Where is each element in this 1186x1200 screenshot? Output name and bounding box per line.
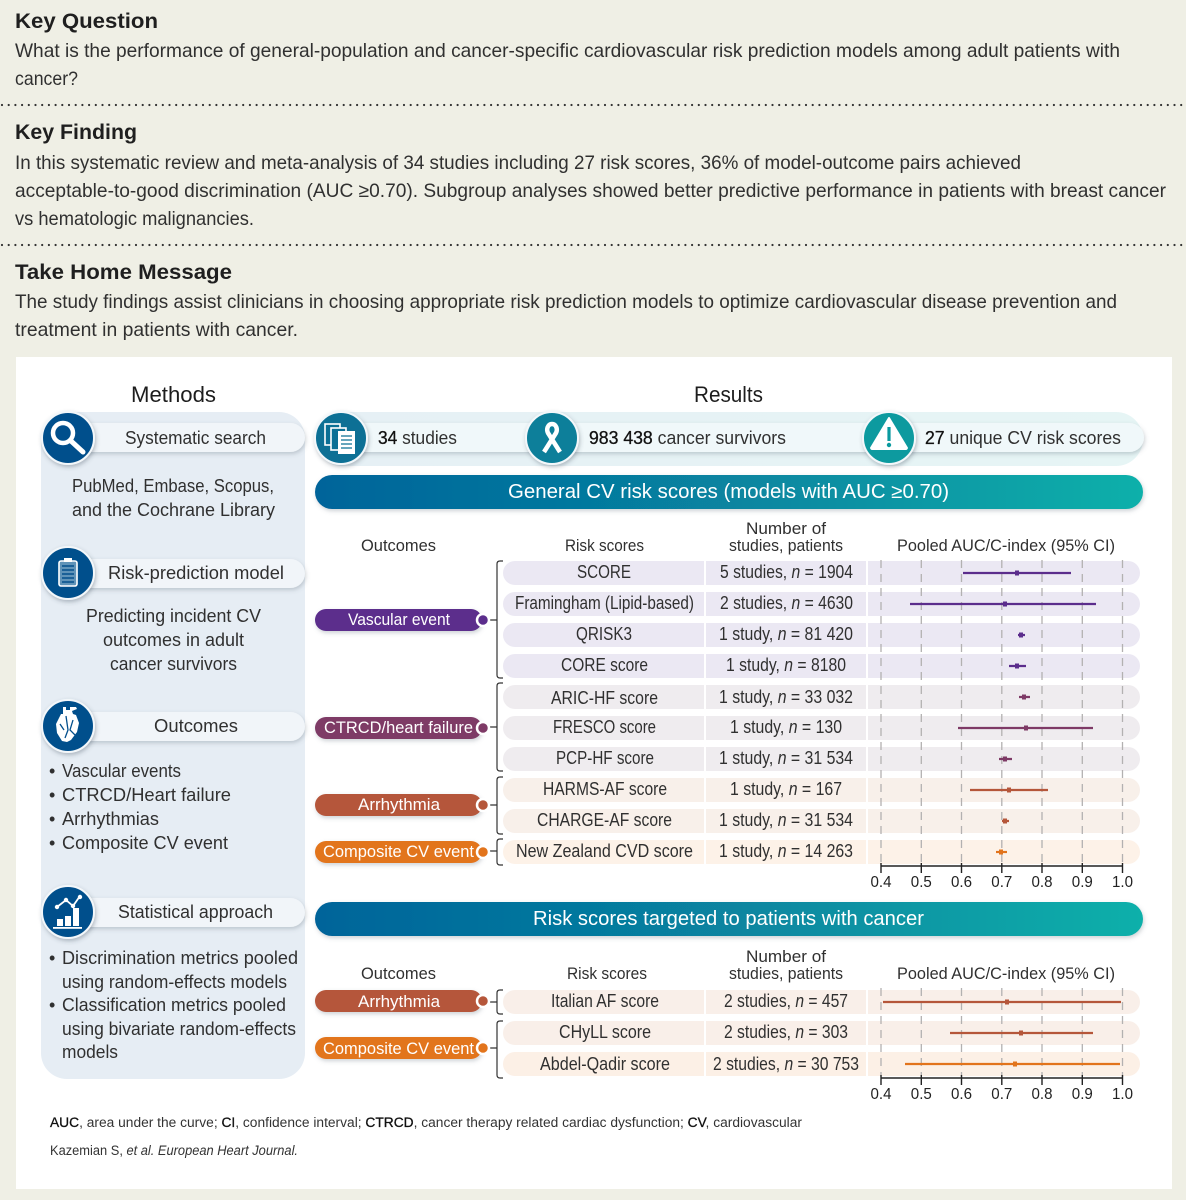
table rows: general: 1 study, n = 31 534 — [719, 810, 853, 830]
banner: general scores: General CV risk scores (models with AUC ≥0.70) — [508, 481, 949, 503]
axis: general: 0.8 — [1032, 874, 1053, 891]
table rows: general: 1 study, n = 167 — [730, 779, 842, 799]
key finding: vs hematologic malignancies. — [15, 208, 254, 230]
main white panel — [16, 357, 1172, 1189]
table rows: general: FRESCO score — [553, 717, 656, 737]
table rows: general: New Zealand CVD score — [516, 841, 693, 861]
outcome groups: cancer — [315, 990, 503, 1078]
table headers: general: Pooled AUC/C-index (95% CI) — [897, 537, 1115, 555]
axis: cancer: 0.6 — [951, 1086, 972, 1103]
axis: cancer: 0.9 — [1072, 1086, 1093, 1103]
table rows: cancer: 2 studies, n = 303 — [724, 1022, 848, 1042]
axis: general: 0.5 — [911, 874, 932, 891]
statistical approach: Statistical approach — [118, 902, 273, 922]
axis: general: 0.7 — [991, 874, 1012, 891]
outcome: composite CV event: Composite CV event — [323, 842, 474, 861]
key finding — [15, 120, 1166, 230]
statistical approach: using bivariate random-effects — [62, 1019, 296, 1039]
axis: cancer: 1.0 — [1112, 1086, 1133, 1103]
statistical approach: using random-effects models — [62, 972, 287, 992]
table rows: cancer — [503, 988, 1140, 1078]
outcomes: CTRCD/Heart failure — [62, 785, 231, 805]
icon: ribbon — [526, 412, 578, 464]
table rows: general: 1 study, n = 81 420 — [719, 624, 853, 644]
axis: general: 0.4 — [870, 874, 892, 891]
table headers: general — [361, 520, 1115, 555]
outcomes: • — [49, 761, 55, 781]
outcome: vascular event — [315, 561, 503, 678]
methods heading: Methods — [131, 382, 216, 407]
table rows: general: 1 study, n = 14 263 — [719, 841, 853, 861]
table headers: general: studies, patients — [729, 537, 843, 555]
axis: cancer: 0.7 — [991, 1086, 1012, 1103]
outcomes: Composite CV event — [62, 833, 228, 853]
table rows: cancer: 2 studies, n = 457 — [724, 991, 848, 1011]
key question: What is the performance of general-population and cancer-specific cardiovascular risk prediction models among adult patients with — [15, 40, 1120, 62]
axis: cancer: 0.8 — [1032, 1086, 1053, 1103]
risk prediction model: Risk-prediction model — [108, 563, 284, 583]
stats bar — [315, 412, 1144, 466]
axis: general: 0.9 — [1072, 874, 1093, 891]
outcome: arrhythmia — [315, 990, 503, 1014]
outcomes: • — [49, 833, 55, 853]
systematic search: PubMed, Embase, Scopus, — [72, 476, 274, 496]
table rows: general: HARMS-AF score — [543, 779, 667, 799]
statistical approach — [42, 886, 305, 1062]
table rows: general: 1 study, n = 31 534 — [719, 748, 853, 768]
abbreviations footnote: AUC, area under the curve; CI, confidence interval; CTRCD, cancer therapy related cardiac dysfunction; CV, cardiovascular — [50, 1115, 803, 1130]
table rows: general: 2 studies, n = 4630 — [720, 593, 853, 613]
citation: Kazemian S, et al. European Heart Journal. — [50, 1143, 298, 1158]
icon: chart — [53, 895, 82, 929]
icon: magnifier — [53, 423, 83, 452]
stat: risk scores: 27 unique CV risk scores — [925, 428, 1121, 448]
table headers: general: Number of — [746, 520, 826, 538]
risk prediction model: outcomes in adult — [103, 630, 244, 650]
systematic search — [42, 412, 305, 520]
banner: cancer-targeted scores: Risk scores targeted to patients with cancer — [533, 908, 924, 930]
table headers: cancer: Number of — [746, 948, 826, 966]
stat: cancer survivors: 983 438 cancer survivors — [589, 428, 786, 448]
outcome groups: general — [315, 561, 503, 865]
key finding: In this systematic review and meta-analysis of 34 studies including 27 risk scores, 36% of model-outcome pairs achieved — [15, 152, 1021, 174]
table rows: cancer: CHyLL score — [559, 1022, 651, 1042]
outcomes: Outcomes — [154, 716, 238, 736]
axis: cancer: 0.4 — [870, 1086, 892, 1103]
statistical approach: • — [49, 995, 55, 1015]
outcome: arrhythmia — [315, 777, 503, 834]
table rows: general: PCP-HF score — [556, 748, 654, 768]
key finding: acceptable-to-good discrimination (AUC ≥0.70). Subgroup analyses showed better predictive performance in patients with breast cancer — [15, 180, 1166, 202]
table rows: cancer: Italian AF score — [551, 991, 659, 1011]
table rows: general: 1 study, n = 33 032 — [719, 687, 853, 707]
systematic search: and the Cochrane Library — [72, 500, 275, 520]
forest plot: cancer scores — [870, 988, 1133, 1103]
statistical approach: Discrimination metrics pooled — [62, 948, 298, 968]
take home message — [15, 260, 1117, 341]
axis: general: 1.0 — [1112, 874, 1133, 891]
table headers: general: Outcomes — [361, 537, 436, 555]
statistical approach: • — [49, 948, 55, 968]
statistical approach: models — [62, 1042, 118, 1062]
outcomes: • — [49, 809, 55, 829]
key question: cancer? — [15, 68, 78, 90]
table rows: general: 1 study, n = 130 — [730, 717, 842, 737]
risk prediction model: cancer survivors — [110, 654, 237, 674]
outcomes: Vascular events — [62, 761, 181, 781]
outcome: composite CV event — [315, 1021, 503, 1078]
results heading: Results — [694, 382, 763, 407]
outcome: composite CV event — [315, 839, 503, 865]
icon: clipboard — [59, 558, 77, 586]
outcome: vascular event: Vascular event — [348, 610, 450, 629]
key question: Key Question — [15, 9, 158, 33]
axis: cancer: 0.5 — [911, 1086, 932, 1103]
key finding: Key Finding — [15, 120, 137, 144]
table rows: cancer: 2 studies, n = 30 753 — [713, 1054, 859, 1074]
icon: warning — [863, 412, 915, 464]
table headers: cancer — [361, 948, 1115, 983]
outcome: arrhythmia: Arrhythmia — [358, 992, 441, 1011]
table rows: general — [503, 558, 1140, 866]
table headers: general: Risk scores — [565, 537, 644, 555]
outcome: arrhythmia: Arrhythmia — [358, 795, 441, 814]
risk prediction model — [42, 547, 305, 674]
statistical approach: Classification metrics pooled — [62, 995, 286, 1015]
table rows: general: SCORE — [577, 562, 631, 582]
panel: methods — [41, 412, 305, 1079]
table rows: general: 1 study, n = 8180 — [726, 655, 846, 675]
outcomes — [42, 700, 305, 853]
icon: documents — [315, 412, 367, 464]
risk prediction model: Predicting incident CV — [86, 606, 261, 626]
outcome: CTRCD/heart failure: CTRCD/heart failure — [324, 718, 473, 737]
table rows: general: 5 studies, n = 1904 — [720, 562, 853, 582]
key question — [15, 9, 1120, 90]
take home message: treatment in patients with cancer. — [15, 319, 298, 341]
stat: studies: 34 studies — [378, 428, 457, 448]
outcome: CTRCD/heart failure — [315, 683, 503, 771]
forest plot: general scores — [870, 560, 1133, 891]
axis: cancer — [870, 1075, 1133, 1103]
banner: general scores — [315, 475, 1143, 509]
table headers: cancer: Outcomes — [361, 965, 436, 983]
table headers: cancer: Risk scores — [567, 965, 647, 983]
table headers: cancer: Pooled AUC/C-index (95% CI) — [897, 965, 1115, 983]
table rows: general: Framingham (Lipid-based) — [515, 593, 694, 613]
take home message: Take Home Message — [15, 260, 232, 284]
outcomes: • — [49, 785, 55, 805]
table rows: general: CHARGE-AF score — [537, 810, 672, 830]
table rows: cancer: Abdel-Qadir score — [540, 1054, 670, 1074]
table rows: general: QRISK3 — [576, 624, 632, 644]
outcomes: Arrhythmias — [62, 809, 159, 829]
table rows: general: CORE score — [561, 655, 648, 675]
banner: cancer-targeted scores — [315, 902, 1143, 936]
axis: general — [870, 863, 1133, 891]
table headers: cancer: studies, patients — [729, 965, 843, 983]
outcome: composite CV event: Composite CV event — [323, 1039, 474, 1058]
take home message: The study findings assist clinicians in choosing appropriate risk prediction models to optimize cardiovascular disease prevention and — [15, 291, 1117, 313]
icon: heart — [56, 707, 79, 742]
table rows: general: ARIC-HF score — [551, 688, 658, 708]
systematic search: Systematic search — [125, 428, 266, 448]
axis: general: 0.6 — [951, 874, 972, 891]
